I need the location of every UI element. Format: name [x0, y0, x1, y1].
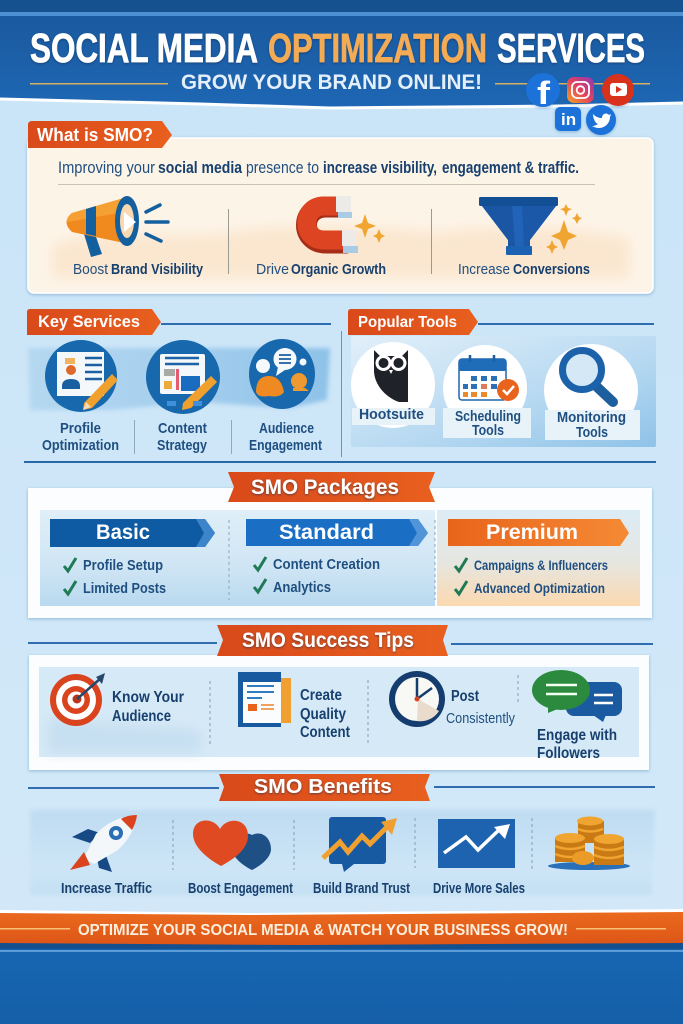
social media icons — [526, 73, 634, 135]
label: audience engagement — [249, 420, 322, 454]
label: boost brand visibility: Brand Visibility — [111, 261, 204, 278]
label: monitoring tools — [545, 409, 640, 441]
icon: hootsuite owl — [351, 342, 435, 428]
package: basic: Profile Setup — [83, 558, 163, 574]
heading: what is SMO: What is SMO? — [37, 125, 153, 145]
label: hootsuite: Hootsuite — [359, 406, 424, 423]
icon: youtube — [602, 74, 634, 106]
label: post consistently — [446, 688, 515, 727]
panel: key services — [27, 309, 331, 454]
icon: rocket — [70, 815, 137, 872]
panel: SMO success tips — [28, 625, 653, 770]
label: drive organic growth: Drive — [256, 261, 289, 278]
icon: twitter — [586, 105, 616, 135]
label: boost engagement: Boost Engagement — [188, 881, 293, 897]
label: drive more sales: Drive More Sales — [433, 881, 525, 897]
package: premium: Advanced Optimization — [474, 580, 605, 596]
heading: SMO packages — [228, 472, 435, 502]
icon: hearts — [193, 821, 271, 870]
definition text: Improving your — [58, 159, 155, 177]
package: standard — [246, 519, 428, 596]
package: standard: Content Creation — [273, 557, 380, 573]
label: monitoring tools: Tools — [576, 424, 608, 441]
heading: key services — [27, 309, 161, 335]
label: know your audience — [112, 689, 184, 725]
package: basic: Basic — [96, 521, 150, 544]
panel: SMO benefits — [28, 774, 655, 897]
definition text: social media — [158, 159, 243, 177]
heading: what is SMO — [28, 121, 172, 148]
icon: document — [238, 672, 291, 727]
icon: magnet — [306, 196, 385, 253]
label: content strategy — [157, 420, 208, 454]
definition text — [58, 159, 595, 185]
icon: facebook: f — [537, 75, 550, 111]
heading: SMO benefits: SMO Benefits — [254, 776, 392, 798]
label: increase conversions: Conversions — [513, 261, 590, 278]
icon: instagram — [567, 77, 594, 103]
panel: what is SMO — [28, 121, 653, 293]
label: engage with followers — [537, 727, 617, 762]
label: create quality content: Quality — [300, 706, 346, 723]
heading: popular tools — [348, 309, 478, 335]
label: boost brand visibility: Boost — [73, 261, 109, 278]
title — [30, 25, 645, 71]
title: OPTIMIZATION — [268, 25, 487, 71]
definition text: presence to — [246, 159, 319, 177]
label: monitoring tools: Monitoring — [557, 409, 626, 426]
icon: sales chart — [438, 819, 515, 868]
label: create quality content: Content — [300, 724, 350, 741]
label: post consistently: Consistently — [446, 710, 515, 727]
package: premium — [448, 519, 629, 596]
label: drive organic growth: Organic Growth — [291, 261, 386, 278]
label: audience engagement: Audience — [259, 420, 314, 437]
icon: megaphone — [66, 196, 168, 257]
icon: chat bubbles — [532, 670, 622, 722]
icon: content strategy — [146, 340, 220, 414]
heading: SMO benefits — [219, 774, 430, 801]
label: engage with followers: Engage with — [537, 727, 617, 744]
package: premium: Premium — [486, 521, 578, 544]
label: content strategy: Content — [158, 420, 207, 437]
icon: clock — [389, 671, 445, 727]
icon: audience engagement — [249, 339, 315, 409]
label: profile optimization: Profile — [60, 420, 101, 437]
label: increase traffic: Increase Traffic — [61, 881, 152, 897]
label: create quality content: Create — [300, 687, 342, 704]
heading: SMO success tips — [217, 625, 448, 656]
label: create quality content — [300, 687, 350, 741]
panel: popular tools — [348, 309, 656, 447]
label: engage with followers: Followers — [537, 745, 600, 762]
package: standard: Standard — [279, 521, 374, 544]
label: increase conversions — [458, 261, 590, 278]
icon: coins — [548, 816, 630, 870]
footer banner — [0, 909, 683, 1024]
label: scheduling tools — [443, 408, 531, 439]
definition text: engagement & traffic. — [442, 159, 579, 177]
label: profile optimization: Optimization — [42, 437, 119, 454]
subtitle: GROW YOUR BRAND ONLINE! — [181, 71, 482, 94]
icon: monitoring magnifier — [544, 344, 638, 436]
label: build brand trust: Build Brand Trust — [313, 881, 410, 897]
heading: popular tools: Popular Tools — [358, 314, 457, 331]
label: increase conversions: Increase — [458, 261, 510, 278]
label: know your audience: Know Your — [112, 689, 184, 706]
label: profile optimization — [42, 420, 119, 454]
label: audience engagement: Engagement — [249, 437, 322, 454]
icon: scheduling calendar — [443, 345, 527, 431]
label: scheduling tools: Scheduling — [455, 408, 521, 425]
icon: brand trust chart — [323, 817, 397, 872]
label: boost brand visibility — [73, 261, 204, 278]
definition text: increase visibility, — [323, 159, 437, 177]
icon: funnel — [479, 197, 582, 255]
label: post consistently: Post — [451, 688, 479, 705]
heading: SMO success tips: SMO Success Tips — [242, 629, 414, 652]
heading: key services: Key Services — [38, 312, 140, 331]
panel: SMO packages — [28, 472, 652, 618]
icon: profile optimization — [45, 340, 118, 412]
footer call to action: OPTIMIZE YOUR SOCIAL MEDIA & WATCH YOUR BUSINESS GROW! — [78, 922, 568, 939]
label: drive organic growth — [256, 261, 386, 278]
label: content strategy: Strategy — [157, 437, 208, 454]
heading: SMO packages: SMO Packages — [251, 476, 399, 499]
icon: linkedin: in — [561, 110, 576, 129]
package: basic: Limited Posts — [83, 581, 166, 597]
header banner — [0, 0, 683, 108]
title: SOCIAL MEDIA — [30, 25, 258, 71]
package: standard: Analytics — [273, 580, 331, 596]
package: basic — [50, 519, 215, 597]
package: premium: Campaigns & Influencers — [474, 557, 608, 573]
icon: target — [50, 673, 105, 726]
label: scheduling tools: Tools — [472, 422, 504, 439]
label: know your audience: Audience — [112, 708, 171, 725]
